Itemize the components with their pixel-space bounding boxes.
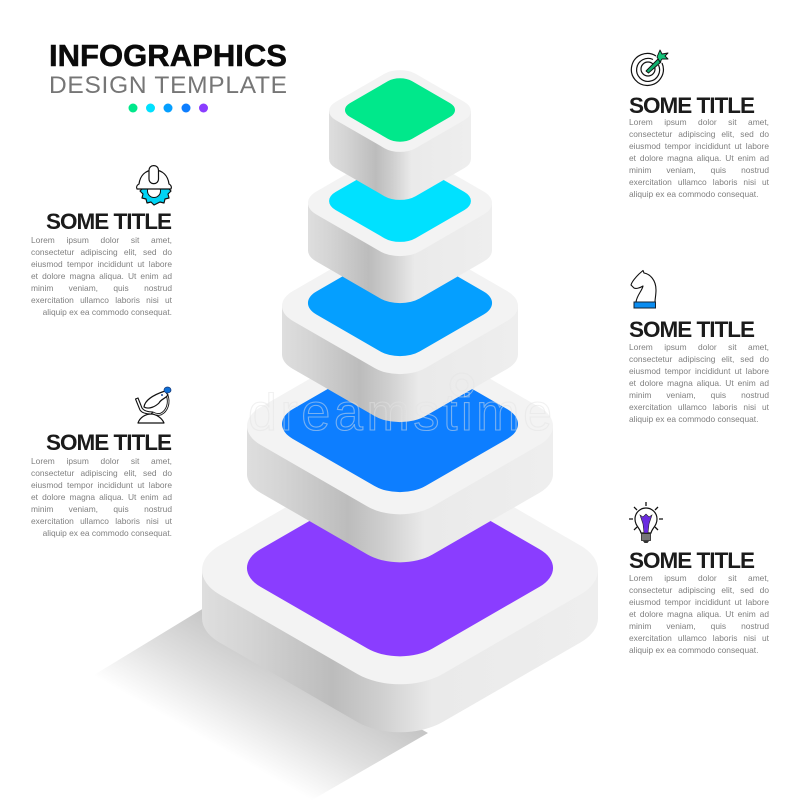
heading: SOME TITLE xyxy=(46,430,171,455)
body text: eiusmod tempor incididunt ut labore xyxy=(629,366,769,376)
tier 1: green block xyxy=(329,70,471,200)
body text: minim veniam, quis nostrud xyxy=(629,390,769,400)
tier 2: cyan block xyxy=(308,174,492,304)
heading: SOME TITLE xyxy=(629,92,754,118)
body text: exercitation ullamco laboris nisi ut xyxy=(629,402,769,412)
icon: chess knight xyxy=(630,270,657,308)
body text: eiusmod tempor incididunt ut labore xyxy=(629,141,769,151)
body text: eiusmod tempor incididunt ut labore xyxy=(31,259,172,269)
body text: et dolore magna aliqua. Ut enim ad xyxy=(629,378,769,388)
body text: consectetur adipiscing elit, sed do xyxy=(31,468,172,478)
heading: SOME TITLE xyxy=(46,209,171,234)
body text: minim veniam, quis nostrud xyxy=(31,504,172,514)
body text: et dolore magna aliqua. Ut enim ad xyxy=(629,153,769,163)
body text: aliquip ex ea commodo consequat. xyxy=(629,189,758,199)
body text xyxy=(629,342,769,424)
panel: left top, helmet xyxy=(31,165,172,317)
body text: Lorem ipsum dolor sit amet, xyxy=(629,117,769,127)
body text: eiusmod tempor incididunt ut labore xyxy=(31,480,172,490)
panel: left bottom, microscope xyxy=(31,386,172,538)
watermark: dreamstime xyxy=(248,384,552,442)
body text: consectetur adipiscing elit, sed do xyxy=(31,247,172,257)
tier 4: blue block xyxy=(247,379,553,562)
icon: helmet with gear xyxy=(136,165,172,206)
body text: et dolore magna aliqua. Ut enim ad xyxy=(31,492,172,502)
panel: right middle, chess knight xyxy=(629,270,769,424)
body text: Lorem ipsum dolor sit amet, xyxy=(629,573,769,583)
body text: Lorem ipsum dolor sit amet, xyxy=(31,456,172,466)
body text xyxy=(629,573,769,655)
body text: exercitation ullamco laboris nisi ut xyxy=(31,295,172,305)
icon: microscope xyxy=(134,386,172,424)
tier 3: light blue block xyxy=(282,270,518,422)
panel: right top, target xyxy=(629,50,769,199)
body text: aliquip ex ea commodo consequat. xyxy=(629,414,758,424)
body text: Lorem ipsum dolor sit amet, xyxy=(629,342,769,352)
body text: et dolore magna aliqua. Ut enim ad xyxy=(629,609,769,619)
body text: minim veniam, quis nostrud xyxy=(629,165,769,175)
main title: INFOGRAPHICS xyxy=(49,39,287,73)
body text: eiusmod tempor incididunt ut labore xyxy=(629,597,769,607)
body text: minim veniam, quis nostrud xyxy=(629,621,769,631)
body text: aliquip ex ea commodo consequat. xyxy=(43,307,172,317)
body text: consectetur adipiscing elit, sed do xyxy=(629,585,769,595)
heading: SOME TITLE xyxy=(629,548,754,572)
subtitle: DESIGN TEMPLATE xyxy=(49,72,287,99)
body text xyxy=(31,235,172,317)
panel: right bottom, light bulb xyxy=(629,502,769,655)
body text: exercitation ullamco laboris nisi ut xyxy=(31,516,172,526)
body text: minim veniam, quis nostrud xyxy=(31,283,172,293)
cast shadow xyxy=(94,608,428,800)
colour dots xyxy=(128,104,208,112)
icon: target with dart xyxy=(630,50,668,86)
body text xyxy=(629,117,769,199)
body text: Lorem ipsum dolor sit amet, xyxy=(31,235,172,245)
body text: consectetur adipiscing elit, sed do xyxy=(629,129,769,139)
body text: aliquip ex ea commodo consequat. xyxy=(43,528,172,538)
body text xyxy=(31,456,172,538)
body text: consectetur adipiscing elit, sed do xyxy=(629,354,769,364)
body text: et dolore magna aliqua. Ut enim ad xyxy=(31,271,172,281)
body text: exercitation ullamco laboris nisi ut xyxy=(629,177,769,187)
body text: exercitation ullamco laboris nisi ut xyxy=(629,633,769,643)
body text: aliquip ex ea commodo consequat. xyxy=(629,645,758,655)
heading: SOME TITLE xyxy=(629,316,754,342)
tier 5: purple base block xyxy=(202,508,598,732)
icon: light bulb xyxy=(629,502,663,543)
